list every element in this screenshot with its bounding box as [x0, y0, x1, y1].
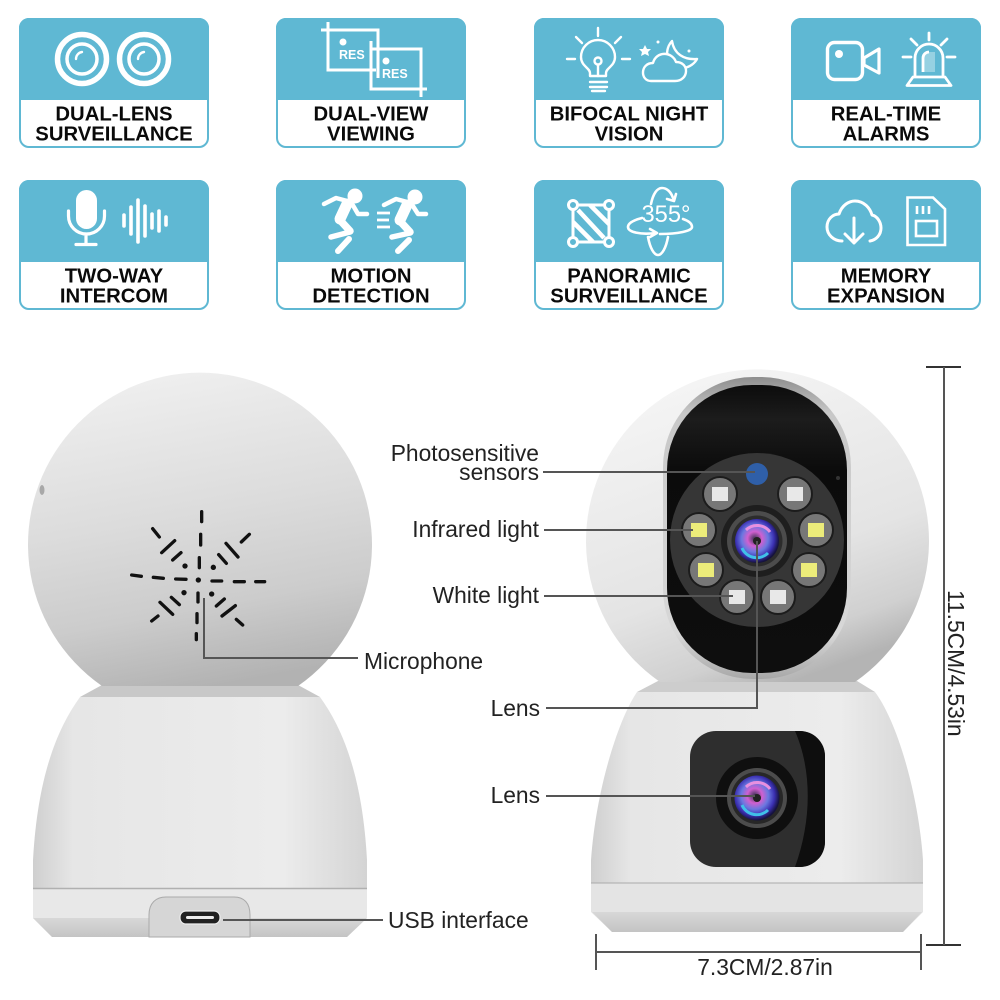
label: MOTION	[330, 266, 412, 288]
icon: running figures	[324, 188, 426, 251]
USB notch	[149, 897, 250, 937]
callout: infrared light: Infrared light	[412, 516, 540, 542]
icon: dual view frames: RES	[382, 67, 408, 81]
label: ALARMS	[843, 124, 929, 146]
icon: dual view frames	[321, 22, 427, 97]
icon: 355 degree rotation	[628, 188, 692, 255]
sphere	[586, 369, 929, 682]
label: SURVEILLANCE	[35, 124, 193, 146]
callout: photosensitive sensors: sensors	[459, 459, 539, 485]
label: TWO-WAY	[65, 266, 164, 288]
USB port	[180, 911, 220, 924]
dimension: height: 11.5CM/4.53in	[943, 590, 969, 737]
label: VISION	[595, 124, 663, 146]
callout: lower lens: Lens	[491, 782, 540, 808]
dimension: height	[926, 367, 969, 945]
icon: light bulb	[567, 28, 630, 91]
card: panoramic surveillance	[534, 180, 724, 309]
base	[33, 697, 367, 889]
icon: memory card	[908, 198, 945, 245]
camera: front view	[586, 369, 929, 932]
lower lens housing	[690, 731, 825, 867]
icon: panorama square	[568, 200, 614, 246]
icon: dual view frames: RES	[339, 48, 365, 62]
card: memory expansion	[791, 180, 981, 309]
card: dual-view viewing	[276, 18, 466, 147]
label: PANORAMIC	[567, 266, 691, 288]
sphere	[28, 373, 372, 686]
callout: microphone	[204, 598, 483, 674]
infrared LEDs	[682, 513, 833, 587]
label: DUAL-LENS	[55, 104, 173, 126]
white LEDs	[703, 477, 812, 614]
callout: USB interface: USB interface	[388, 907, 529, 933]
label: REAL-TIME	[831, 104, 941, 126]
card: two-way intercom	[19, 180, 209, 309]
label: EXPANSION	[827, 286, 945, 308]
callout: upper lens: Lens	[491, 695, 540, 721]
label: DETECTION	[312, 286, 430, 308]
dimension: width: 7.3CM/2.87in	[697, 954, 833, 980]
label: INTERCOM	[60, 286, 168, 308]
dimension: width	[596, 934, 921, 980]
card: bifocal night vision	[534, 18, 724, 147]
microphone holes	[132, 512, 265, 640]
icon: siren	[903, 33, 955, 86]
upper lens	[721, 505, 793, 577]
callout: photosensitive sensors: Photosensitive	[391, 440, 539, 466]
label: VIEWING	[327, 124, 415, 146]
card: dual-lens surveillance	[19, 18, 209, 147]
label: SURVEILLANCE	[550, 286, 708, 308]
sensor	[746, 463, 768, 485]
icon: 355 degree rotation: 355°	[642, 201, 690, 228]
dark panel	[663, 377, 851, 679]
card: real-time alarms	[791, 18, 981, 147]
label: MEMORY	[841, 266, 932, 288]
callout: white light: White light	[433, 582, 540, 608]
icon: cloud download	[827, 201, 881, 243]
LED ring	[670, 453, 844, 627]
icon: two lenses	[58, 34, 168, 84]
callout: microphone: Microphone	[364, 648, 483, 674]
icon: sound wave	[124, 200, 166, 242]
icon: moon and cloud	[639, 40, 697, 81]
label: DUAL-VIEW	[314, 104, 429, 126]
camera: rear view	[28, 373, 372, 937]
callout: upper lens	[491, 541, 757, 721]
callout: photosensitive sensors	[391, 440, 755, 485]
card: motion detection	[276, 180, 466, 309]
label: BIFOCAL NIGHT	[550, 104, 709, 126]
base	[591, 692, 923, 883]
icon: video camera	[828, 42, 879, 80]
icon: microphone	[68, 190, 104, 244]
lower lens	[716, 757, 798, 839]
